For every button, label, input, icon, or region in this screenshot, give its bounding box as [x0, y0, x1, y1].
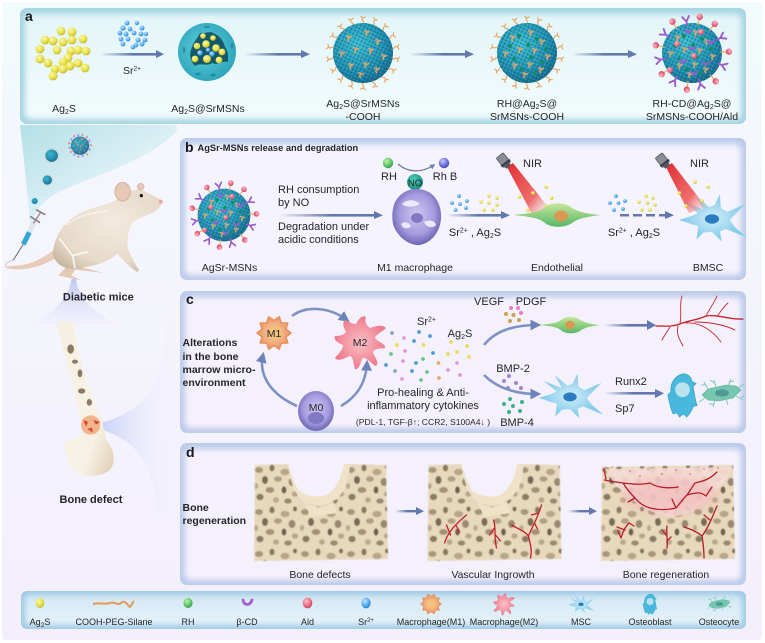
label: Ag2S: 2	[461, 334, 465, 341]
icon: osteocyte	[699, 379, 744, 407]
label: Diabetic mice: Diabetic mice	[63, 291, 134, 303]
label: Ag2S@SrMSNs-COOH: 2	[339, 104, 343, 111]
icon: syringe	[5, 210, 45, 267]
label: Sr2+: Sr	[417, 316, 428, 328]
arrow	[572, 50, 637, 58]
legend: Macrophage M1	[397, 594, 465, 627]
icon: M2 cell: M2	[353, 337, 367, 349]
NIR beam 1: NIR	[523, 158, 542, 170]
icon: COOH-modified sphere	[327, 16, 399, 90]
label: Sr2+, Ag2S: S	[494, 227, 501, 239]
label c: c	[186, 291, 194, 307]
arrow	[410, 50, 474, 58]
label: Ag2S@SrMSNs: 2	[184, 109, 188, 116]
arrow with Runx2 and Sp7	[604, 376, 664, 415]
label: Ag2S: S	[69, 103, 76, 115]
legend	[21, 591, 746, 629]
label: RH@Ag2S@SrMSNs-COOH: S@	[539, 98, 557, 110]
text: alterations: Alterations	[182, 337, 238, 349]
arrow with Runx2 and Sp7: Sp7	[615, 403, 635, 415]
labels under panel d	[289, 569, 709, 581]
legend: Macrophage M2: Macrophage(M2)	[470, 617, 538, 627]
label d: d	[186, 444, 195, 460]
text: pro-healing cytokines: Pro-healing & Anti-	[377, 387, 469, 399]
dashed arrow	[620, 211, 674, 219]
label: RH@Ag2S@SrMSNs-COOH: 2	[536, 104, 540, 111]
left column: mouse and bone	[5, 125, 180, 515]
arrow	[568, 507, 597, 515]
bone block: vascular ingrowth	[428, 464, 562, 561]
NIR beam 2	[654, 152, 710, 213]
legend: Ag2S: S	[44, 617, 50, 627]
legend: Osteoblast	[628, 594, 672, 627]
bone block: defect	[254, 464, 388, 561]
text: degradation conditions	[278, 221, 369, 246]
label: Sr2+, Ag2S: , Ag	[627, 227, 649, 239]
labels under panel b: M1 macrophage	[377, 262, 453, 274]
text: RH consumption	[278, 184, 359, 209]
NIR beam 1	[495, 152, 553, 214]
label: Ag2S: 2	[65, 109, 69, 116]
label: Ag2S: Ag	[52, 103, 65, 115]
RH to RhB reaction	[381, 158, 457, 190]
text: pro-healing cytokines	[356, 387, 490, 427]
label: RH@Ag2S@SrMSNs-COOH: RH@Ag	[497, 98, 536, 110]
label: VEGF PDGF: PDGF	[516, 296, 547, 308]
NIR beam 2: NIR	[690, 158, 709, 170]
bone block: regeneration	[601, 465, 735, 561]
label: Sr2+, Ag2S: , Ag	[468, 227, 490, 239]
labels under panel d: Bone defects	[289, 569, 351, 581]
labels under panel b: AgSr-MSNs	[202, 262, 257, 274]
text: bone regeneration: Bone	[182, 502, 209, 514]
icon: M0 cell	[298, 391, 334, 431]
text: alterations: in the bone	[182, 351, 239, 363]
legend: Ald	[301, 598, 314, 627]
label: BMP-4: BMP-4	[500, 417, 534, 429]
text: alterations: environment	[182, 377, 246, 389]
icon: osteoblast	[668, 374, 697, 417]
icon: M0 cell: M0	[309, 402, 323, 414]
text: degradation conditions: acidic conditions	[278, 234, 359, 246]
label: Sr2+, Ag2S: 2	[490, 233, 494, 240]
RH to RhB reaction: NO	[408, 178, 422, 189]
legend: Ag2S: Ag	[30, 617, 41, 627]
text: bone regeneration: regeneration	[182, 515, 246, 527]
label: Ag2S@SrMSNs-COOH	[326, 98, 400, 123]
funnel from bone to panels	[99, 265, 180, 515]
icon: hollow Ag2S@SrMSNs sphere	[178, 23, 236, 81]
label: Sr2+, Ag2S: Sr	[608, 227, 619, 239]
funnel from foot to bone	[30, 279, 120, 327]
panel b heading: AgSr-MSNs release and degradation	[198, 143, 358, 153]
label: RH-CD@Ag2S@SrMSNs-COOH/Ald: RH-CD@Ag	[653, 98, 710, 110]
legend: Osteoblast: Osteoblast	[628, 617, 672, 627]
bone defect site	[81, 415, 100, 435]
icon: M1 macrophage cell	[392, 189, 441, 245]
legend: Macrophage M1: Macrophage(M1)	[397, 617, 465, 627]
legend: Sr2+	[358, 598, 374, 627]
icon: AgSr-MSNs sphere	[189, 180, 259, 250]
arrow with Runx2 and Sp7: Runx2	[615, 376, 647, 388]
label: VEGF PDGF: VEGF	[474, 296, 504, 308]
panel b: release and degradation	[180, 138, 746, 280]
labels under panel b	[202, 262, 724, 274]
label: Ag2S: S	[465, 328, 472, 340]
icon: MSC cell	[539, 374, 602, 418]
label: Ag2S@SrMSNs-COOH: S@SrMSNs	[343, 98, 400, 110]
label: Ag2S: Ag	[448, 328, 461, 340]
label: Sr2+, Ag2S: Sr	[449, 227, 460, 239]
icon: M1 cell: M1	[267, 328, 281, 340]
legend: Macrophage M2	[470, 593, 538, 627]
legend: COOH-PEG-Silane	[75, 601, 153, 627]
illustration: mouse	[5, 182, 163, 280]
curved arrow to MSC	[484, 375, 538, 394]
label: Ag2S@SrMSNs: Ag	[171, 103, 184, 115]
text: RH consumption: RH consumption	[278, 184, 359, 196]
label: Sr2+, Ag2S: 2	[649, 233, 653, 240]
arrow	[447, 211, 510, 219]
label: RH@Ag2S@SrMSNs-COOH: SrMSNs-COOH	[490, 111, 564, 123]
text: degradation conditions: Degradation under	[278, 221, 369, 233]
label: BMP-2: BMP-2	[496, 363, 530, 375]
panel c: bone marrow micro-environment	[180, 291, 746, 433]
legend: Osteocyte	[699, 596, 739, 627]
BMP-2 dots	[502, 374, 523, 390]
label: RH-CD@Ag2S@SrMSNs-COOH/Ald	[646, 98, 738, 123]
icon: Sr2+ cluster	[118, 20, 148, 49]
legend: MSC	[569, 595, 594, 627]
illustration: blood vessels	[656, 296, 743, 346]
label a: a	[25, 8, 33, 24]
RH to RhB reaction: RH	[381, 171, 397, 183]
curved arrow to endothelial	[484, 325, 538, 345]
legend: Sr2+: Sr	[358, 617, 367, 627]
legend: Ag2S	[30, 598, 50, 629]
label: Bone defect: Bone defect	[60, 494, 123, 506]
funnel from panel a	[20, 125, 177, 225]
legend: RH	[182, 598, 194, 627]
labels under panel d: Bone regeneration	[623, 569, 709, 581]
Sr and Ag2S particles 1	[450, 194, 499, 212]
RH to RhB reaction: Rh B	[433, 171, 457, 183]
icon: M2 cell	[335, 316, 386, 369]
label: Sr2+: 2+	[428, 316, 436, 324]
VEGF PDGF dots	[504, 306, 523, 323]
label: RH@Ag2S@SrMSNs-COOH	[490, 98, 564, 123]
macrophage cycle arrows	[262, 309, 367, 406]
label: RH-CD@Ag2S@SrMSNs-COOH/Ald: SrMSNs-COOH/Ald	[646, 111, 738, 123]
label: Ag2S@SrMSNs-COOH: Ag	[326, 98, 339, 110]
text: pro-healing cytokines: inflammatory cytokines	[367, 400, 479, 412]
labels under panel b: BMSC	[693, 262, 724, 274]
nanoparticles in funnel	[32, 133, 92, 204]
icon: endothelial cell	[514, 203, 600, 227]
icon: RH-loaded sphere	[491, 16, 563, 90]
arrow	[604, 320, 656, 330]
icon: BMSC cell	[680, 195, 746, 241]
legend: Osteocyte: Osteocyte	[699, 617, 739, 627]
label: Ag2S@SrMSNs-COOH: -COOH	[346, 111, 380, 123]
label: Ag2S@SrMSNs: S@SrMSNs	[188, 103, 245, 115]
Sr2+ label: 2+	[134, 66, 141, 72]
BMP-4 dots	[502, 397, 524, 414]
cytokine dots	[384, 330, 471, 382]
illustration: bone	[56, 322, 114, 476]
legend: Sr2+: 2+	[367, 618, 374, 624]
arrow	[395, 507, 424, 515]
text: alterations: marrow micro-	[182, 364, 256, 376]
labels under panel d: Vascular Ingrowth	[451, 569, 535, 581]
text: pro-healing cytokines: (PDL-1, TGF-β↑; CCR2, S100A4↓ )	[356, 417, 490, 427]
label: RH-CD@Ag2S@SrMSNs-COOH/Ald: S@	[714, 98, 731, 110]
text: alterations	[182, 337, 256, 389]
legend: RH: RH	[182, 617, 194, 627]
arrow	[245, 50, 310, 58]
icon: Ag2S cluster	[36, 27, 90, 80]
text: RH consumption: by NO	[278, 197, 310, 209]
panel d: bone regeneration	[180, 443, 746, 585]
label: Sr2+, Ag2S: S	[653, 227, 660, 239]
legend: beta-CD: β-CD	[236, 617, 258, 627]
icon: fully functionalised sphere	[652, 13, 732, 93]
Sr and Ag2S particles 2	[608, 194, 657, 212]
arrow	[100, 50, 164, 58]
labels under panel b: Endothelial	[531, 262, 583, 274]
icon: M1 cell	[257, 317, 291, 349]
icon: endothelial cell	[540, 317, 600, 333]
Sr2+ label: Sr	[123, 65, 134, 77]
legend: beta-CD	[236, 600, 258, 627]
legend: COOH-PEG-Silane: COOH-PEG-Silane	[75, 617, 153, 627]
legend: Ald: Ald	[301, 617, 314, 627]
label: RH-CD@Ag2S@SrMSNs-COOH/Ald: 2	[710, 104, 714, 111]
label: VEGF PDGF	[474, 296, 547, 308]
label b: b	[185, 139, 194, 155]
label: Sr2+, Ag2S: 2+	[460, 228, 468, 234]
label: Sr2+, Ag2S: 2+	[619, 228, 627, 234]
panel a: synthesis	[20, 8, 746, 124]
legend: MSC: MSC	[571, 617, 592, 627]
text: bone regeneration	[182, 502, 246, 527]
legend: Ag2S: 2	[41, 622, 45, 629]
arrow	[278, 211, 383, 219]
